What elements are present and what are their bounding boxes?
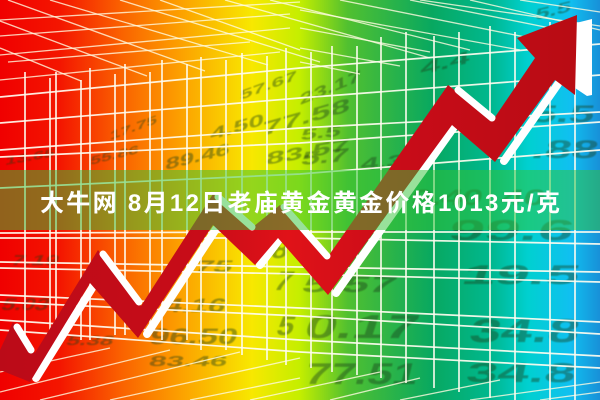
faded skewed stock numbers: 9.40 (409, 185, 486, 210)
arrow head white side (572, 19, 592, 96)
faded skewed stock numbers: 40 (499, 185, 549, 210)
faded skewed stock numbers: 4.16 (162, 294, 229, 316)
perspective ceiling lines (0, 0, 600, 81)
title text: 大牛网 8月12日老庙黄金黄金价格1013元/克 (40, 189, 560, 217)
faded skewed stock numbers: 0.17 (300, 309, 424, 346)
faded skewed stock numbers: 4.3 (359, 151, 406, 174)
faded skewed stock numbers: 5.5 (299, 122, 343, 143)
faded skewed stock numbers: 34.8 (466, 312, 583, 349)
faded skewed stock numbers: 99.6 (445, 214, 578, 246)
faded skewed stock numbers: 17.75 (110, 113, 157, 143)
faded skewed stock numbers: 13.65 (5, 146, 56, 168)
faded skewed stock numbers: 5.57 (298, 272, 401, 297)
perspective floor lines (0, 348, 600, 400)
faded skewed stock numbers: 5.5 (529, 100, 598, 127)
faded skewed stock numbers: 8 (268, 235, 294, 264)
faded skewed stock numbers: 5.75 (163, 257, 236, 276)
title band (0, 170, 600, 230)
faded skewed stock numbers: 83.46 (147, 354, 230, 370)
faded skewed stock numbers: 23.17 (300, 66, 361, 109)
faded skewed stock numbers: 89.46 (165, 139, 231, 174)
faded skewed stock numbers: 19.5 (458, 260, 585, 290)
faded skewed stock numbers: 77.58 (262, 94, 351, 141)
faded skewed stock numbers: 5.38 (63, 334, 117, 348)
arrow lower white edges (36, 84, 558, 378)
faded skewed stock numbers: 83.57 (264, 134, 351, 169)
faded skewed stock numbers: 7.19 (8, 253, 62, 269)
faded skewed stock numbers: 5 (273, 312, 299, 341)
faded skewed stock numbers: 96.50 (146, 324, 241, 349)
faded skewed stock numbers: 4.50 (210, 110, 265, 144)
arrow upper white edges (17, 90, 492, 350)
faded skewed stock numbers: 5.7 (299, 144, 351, 169)
faded skewed stock numbers: 7 (269, 266, 298, 296)
faded skewed stock numbers: 4.4 (420, 47, 471, 79)
faded skewed stock numbers: .88 (529, 136, 600, 164)
faded skewed stock numbers: 77.51 (301, 358, 422, 391)
faded skewed stock numbers: 34.8 (464, 358, 579, 388)
faded skewed stock numbers: 55.86 (90, 143, 140, 168)
faded skewed stock numbers: 57.67 (240, 68, 297, 103)
